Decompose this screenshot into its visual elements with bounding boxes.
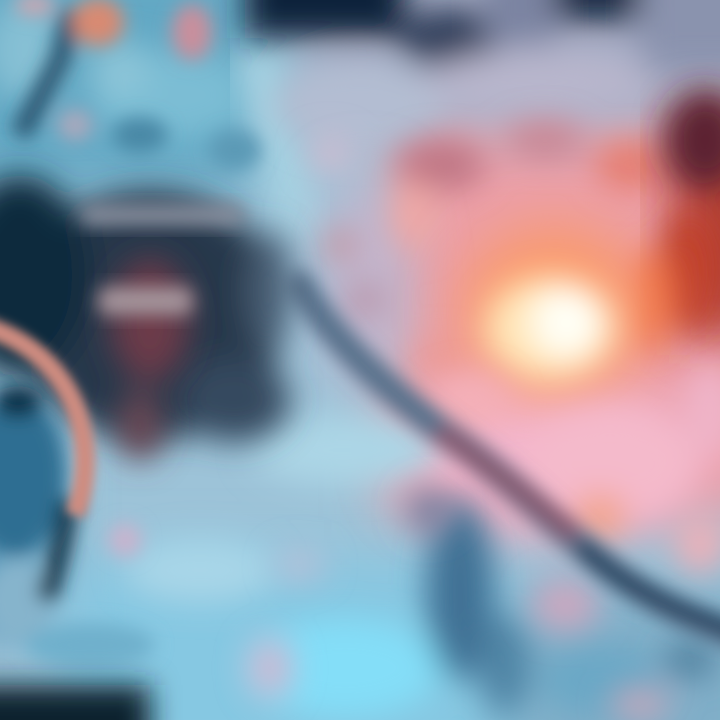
- blurred text: upper: [80, 204, 245, 226]
- diagonal dark band: [300, 285, 720, 640]
- region: dark red right edge: [680, 120, 720, 335]
- region: red haze in dark blob: [110, 258, 190, 461]
- region: dark left blob: [0, 175, 292, 442]
- region: lower left teal: [0, 386, 155, 667]
- sun glow: orange halo: [460, 225, 650, 395]
- region: light diagonal strip: [255, 45, 305, 240]
- region: bottom patches: [248, 488, 716, 720]
- region: top center dark: [245, 0, 720, 150]
- region: top left streaks: [15, 0, 261, 170]
- region: bright cyan pool: [125, 415, 660, 718]
- region: top left teal: [0, 0, 250, 140]
- arc: pink orange ring: [0, 325, 85, 515]
- glow core: [484, 276, 616, 380]
- region: mottled red patches: [308, 122, 665, 380]
- region: maroon corner: [628, 90, 720, 350]
- bottom base colours: [60, 490, 720, 720]
- region: lower right pink: [430, 360, 720, 573]
- region: bottom left dark corner: [0, 640, 150, 720]
- blurred text: lower: [98, 287, 193, 315]
- region: right pink field: [325, 175, 700, 530]
